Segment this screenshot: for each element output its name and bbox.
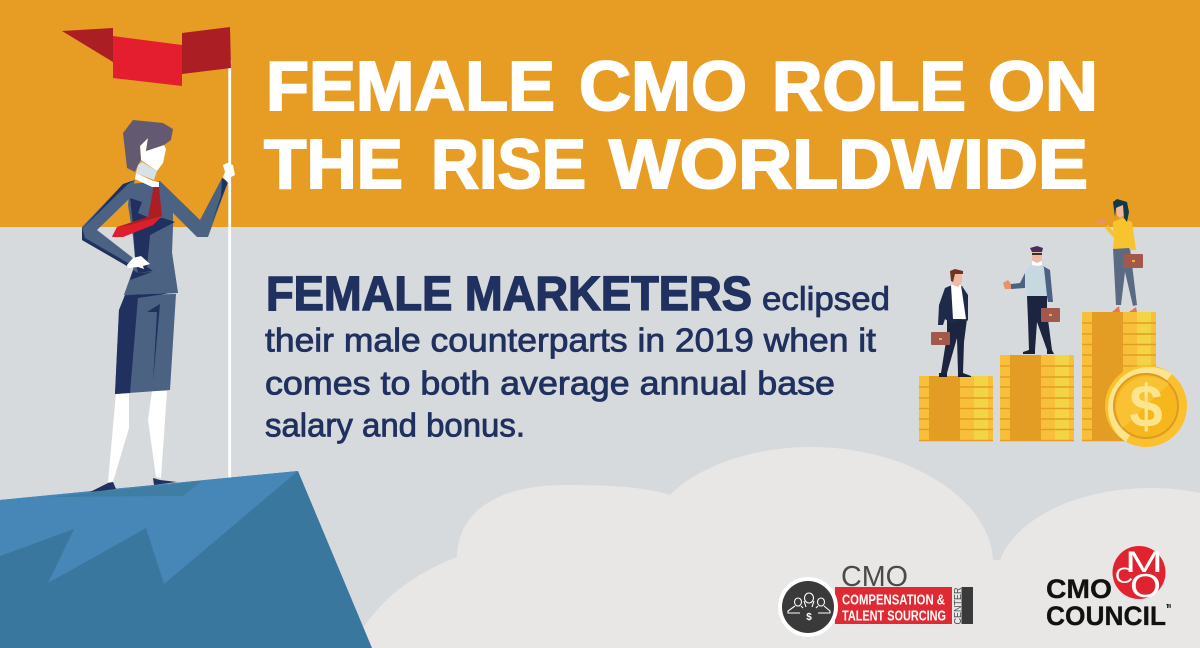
red circle	[1112, 546, 1166, 599]
dark end block	[962, 587, 973, 624]
flag pole	[228, 60, 231, 480]
hand	[1003, 280, 1011, 289]
briefcase	[931, 332, 950, 345]
body text: eclipsed	[762, 280, 890, 317]
circle badge	[778, 577, 838, 637]
hand on pole	[223, 163, 235, 183]
white letters in circle	[1115, 546, 1163, 604]
person: man with glasses	[1003, 246, 1060, 354]
face	[1116, 205, 1124, 218]
orange header band	[0, 0, 1200, 227]
body text	[265, 268, 890, 444]
title	[264, 47, 1098, 203]
sleeves	[1043, 266, 1053, 302]
red banner	[835, 587, 952, 624]
wordmark: TM	[1166, 604, 1171, 610]
dollar coin	[1105, 365, 1187, 447]
white letters in circle: O	[1130, 567, 1161, 604]
CMO wordmark: CMO	[841, 561, 908, 593]
neck	[136, 162, 157, 180]
body text: FEMALE MARKETERS	[266, 268, 752, 321]
shoes	[90, 478, 177, 492]
left arm	[82, 180, 135, 266]
title: WORLDWIDE	[609, 125, 1088, 203]
body text: comes to both average annual base	[265, 364, 835, 402]
tie	[112, 182, 162, 237]
hand on hip	[127, 256, 150, 269]
trousers	[1027, 295, 1052, 350]
hand	[1096, 220, 1105, 224]
logo: CMO Compensation and Talent Sourcing Center: TALENT SOURCING	[842, 608, 946, 624]
collar	[135, 173, 159, 187]
stack 1	[919, 376, 993, 441]
sweater	[1105, 218, 1136, 250]
person: woman in yellow	[1096, 199, 1143, 312]
jacket	[938, 285, 968, 325]
wordmark: COUNCIL	[1046, 601, 1166, 631]
coin stacks	[919, 312, 1156, 441]
briefcase	[1123, 254, 1143, 268]
white letters in circle: C	[1115, 563, 1133, 588]
vertical center label: CENTER	[952, 587, 964, 624]
trousers	[941, 319, 967, 373]
skirt	[115, 294, 176, 394]
right arm	[160, 178, 228, 237]
body text: salary and bonus.	[265, 406, 525, 444]
wordmark: CMO	[1046, 574, 1112, 604]
stack 3	[1082, 312, 1156, 441]
person: man in dark suit	[931, 269, 971, 377]
title: ROLE	[772, 47, 966, 125]
wordmark	[1046, 574, 1171, 631]
hair	[1113, 199, 1129, 222]
logo: CMO Compensation and Talent Sourcing Center: $	[806, 612, 812, 623]
stack 2	[1000, 355, 1074, 441]
shoes	[939, 373, 947, 377]
title: ON	[988, 47, 1098, 125]
face	[140, 138, 166, 171]
head	[951, 273, 962, 287]
flag	[62, 27, 231, 86]
body text: their male counterparts in 2019 when it	[265, 322, 876, 358]
title: FEMALE	[266, 47, 555, 125]
head	[1032, 252, 1042, 263]
heels	[1112, 306, 1120, 312]
clouds	[352, 447, 1200, 648]
white letters in circle: M	[1125, 546, 1163, 579]
legs	[108, 391, 167, 482]
shirt	[951, 285, 966, 319]
shoes	[1023, 350, 1035, 354]
torso jacket	[124, 181, 178, 295]
briefcase	[1041, 308, 1060, 322]
mountain	[0, 471, 372, 648]
title: CMO	[579, 47, 747, 125]
title: THE	[264, 125, 403, 203]
dollar coin: $	[1129, 373, 1163, 440]
businesswoman with flag	[82, 120, 235, 492]
people and dollar icon	[788, 593, 830, 613]
logo: CMO Council	[1046, 546, 1171, 631]
hair	[123, 120, 173, 172]
trousers	[1113, 248, 1137, 306]
logo: CMO Compensation and Talent Sourcing Center	[778, 561, 973, 637]
title: RISE	[431, 125, 586, 203]
banner text: COMPENSATION &	[842, 592, 945, 608]
vest	[1025, 263, 1047, 296]
